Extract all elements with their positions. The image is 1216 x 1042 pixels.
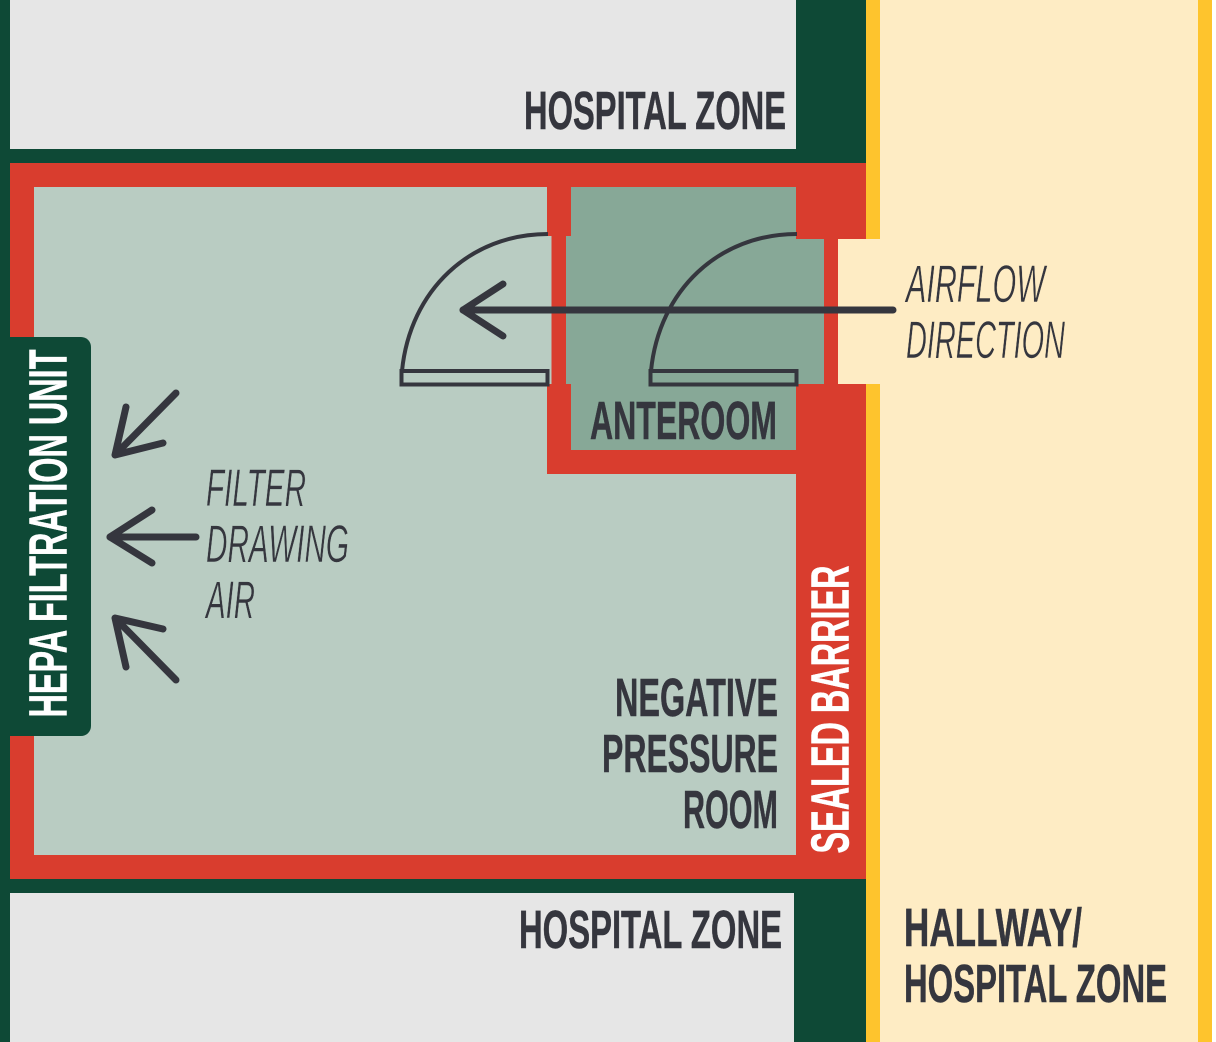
label: filter drawing air: DRAWING [206, 515, 349, 574]
HEPA filtration unit [0, 337, 91, 736]
label: top hospital zone: HOSPITAL ZONE [524, 81, 786, 141]
label: airflow direction: AIRFLOW [904, 255, 1048, 314]
label: filter drawing air: AIR [204, 571, 255, 630]
label: negative pressure room: ROOM [683, 780, 778, 840]
icon: right door swing [650, 234, 797, 384]
label: airflow direction: DIRECTION [906, 311, 1065, 370]
panel: anteroom [566, 187, 824, 450]
label: filter drawing air [204, 459, 349, 630]
label: negative pressure room: NEGATIVE [615, 668, 778, 728]
label: sealed barrier: SEALED BARRIER [800, 566, 860, 854]
airflow opening in barrier [838, 239, 880, 384]
label: bottom hospital zone: HOSPITAL ZONE [519, 900, 782, 960]
dark green structural walls [0, 0, 866, 1042]
HEPA label: HEPA FILTRATION UNIT [18, 349, 78, 718]
icon: left door swing [402, 234, 548, 384]
label: negative pressure room: PRESSURE [602, 724, 778, 784]
label: negative pressure room [602, 668, 778, 840]
label: hallway hospital zone [904, 898, 1167, 1014]
sealed barrier red wall [10, 163, 866, 879]
panel: negative pressure room [34, 187, 796, 855]
arrow: airflow direction [463, 284, 893, 336]
label: hallway hospital zone: HALLWAY/ [904, 898, 1082, 958]
hallway zone panel [866, 0, 1212, 1042]
label: airflow direction [904, 255, 1065, 370]
arrow: filter intake upper [115, 393, 176, 455]
label: anteroom: ANTEROOM [590, 391, 777, 451]
panel: top hospital zone [10, 0, 796, 149]
arrow: filter intake middle [110, 510, 196, 563]
arrow: filter intake lower [115, 618, 176, 680]
panel: bottom hospital zone [10, 893, 794, 1042]
label: filter drawing air: FILTER [206, 459, 306, 518]
